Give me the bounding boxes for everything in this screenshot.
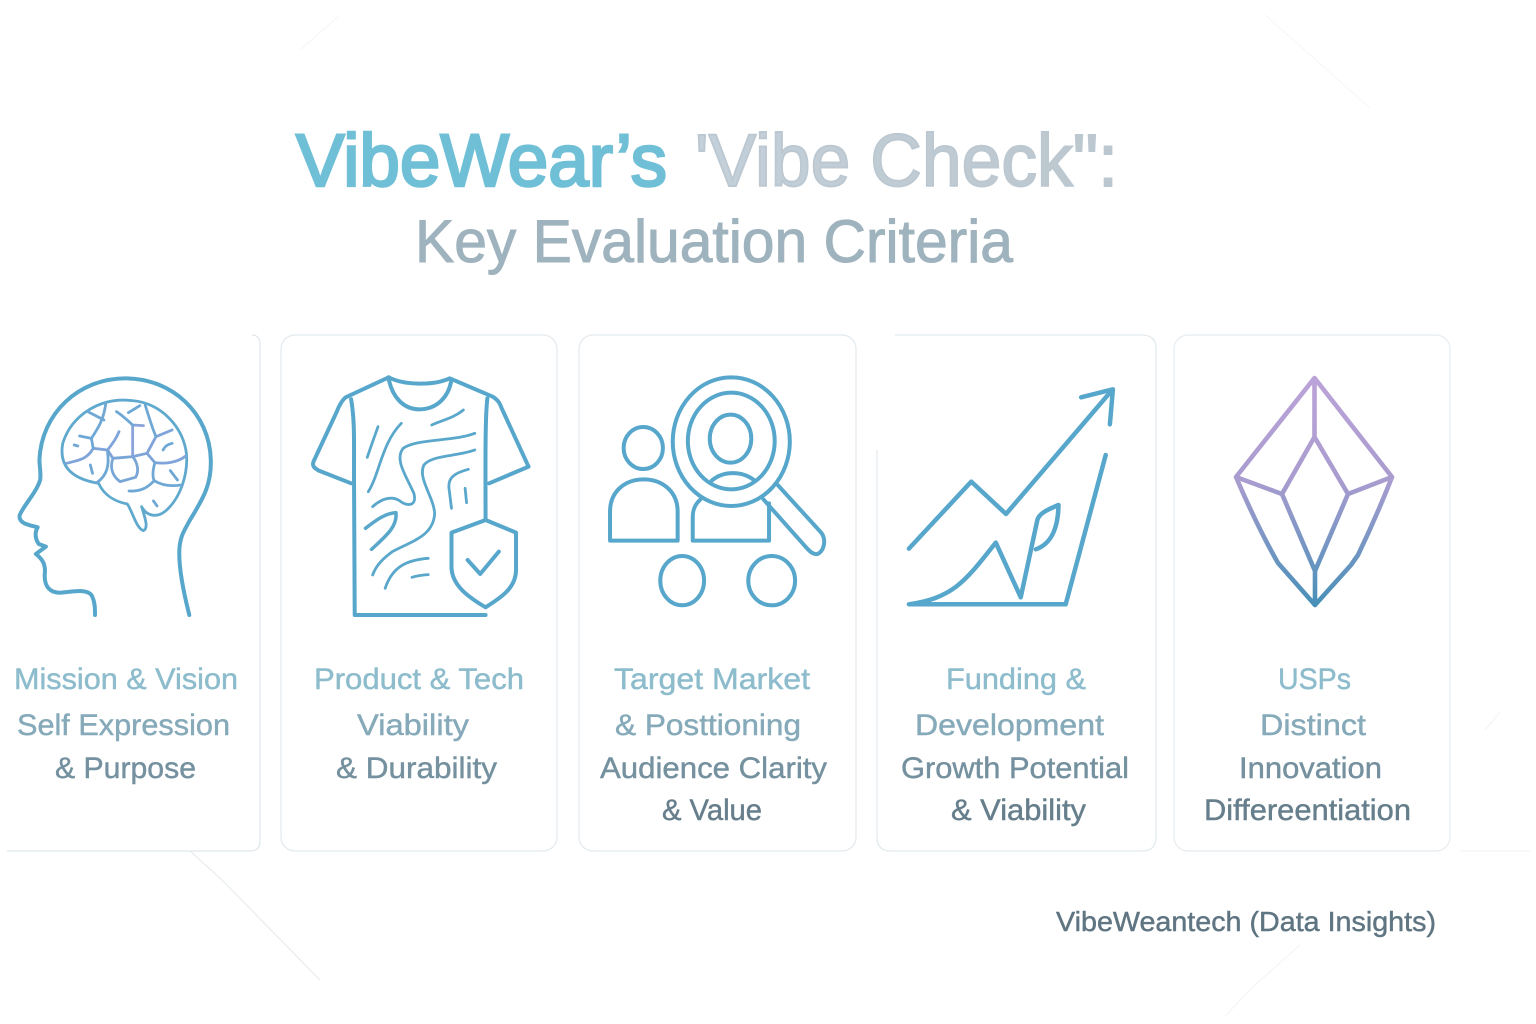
label: mission text: & Purpose xyxy=(55,752,196,785)
label: funding text: Funding & xyxy=(946,663,1086,696)
label: funding text xyxy=(901,663,1129,827)
label: target market text: & Value xyxy=(662,794,762,827)
label: USPs text: Differeentiation xyxy=(1204,794,1411,827)
label: funding text: Growth Potential xyxy=(901,752,1129,785)
title: VibeWear's: VibeWear’s xyxy=(296,119,667,202)
title xyxy=(296,119,1118,275)
label: mission text: Self Expression xyxy=(17,709,230,742)
subtitle: Key Evaluation Criteria xyxy=(415,208,1014,275)
decorative baseline extension xyxy=(1460,850,1530,852)
label: mission text: Mission & Vision xyxy=(14,663,238,696)
panel: USPs xyxy=(1174,335,1450,851)
label: funding text: Development xyxy=(915,709,1105,742)
label: mission text xyxy=(14,663,238,785)
icon: t-shirt with shield xyxy=(313,377,529,615)
label: USPs text: Innovation xyxy=(1239,752,1382,785)
label: funding text: & Viability xyxy=(951,794,1086,827)
label: product text: Product & Tech xyxy=(314,663,524,696)
label: USPs text: Distinct xyxy=(1260,709,1367,742)
label: USPs text: USPs xyxy=(1278,663,1351,696)
label: target market text xyxy=(600,663,827,827)
icon: head with brain xyxy=(20,378,211,615)
icon: crystal gem xyxy=(1236,378,1392,605)
panel: product and tech xyxy=(281,335,557,851)
label: product text xyxy=(314,663,524,785)
attribution: VibeWeantech (Data Insights) xyxy=(1056,906,1436,937)
label: USPs text xyxy=(1204,663,1411,827)
label: product text: & Durability xyxy=(336,752,497,785)
label: product text: Viability xyxy=(357,709,469,742)
panel: mission and vision xyxy=(7,335,260,851)
icon: growth arrow with sprout xyxy=(909,389,1113,604)
panel: funding and development xyxy=(877,335,1156,851)
label: target market text: Target Market xyxy=(614,663,811,696)
label: target market text: Audience Clarity xyxy=(600,752,827,785)
title: Vibe Check: 'Vibe Check": xyxy=(695,119,1118,202)
label: target market text: & Posttioning xyxy=(615,709,801,742)
icon: audience with magnifier xyxy=(610,377,824,605)
panel: target market xyxy=(579,335,856,851)
